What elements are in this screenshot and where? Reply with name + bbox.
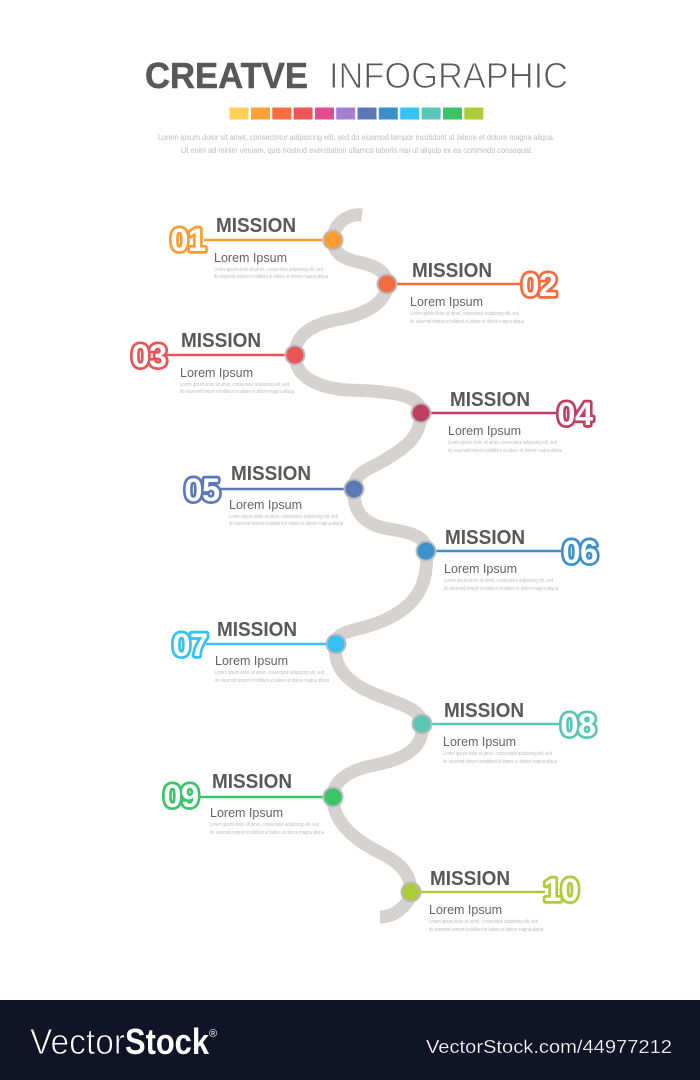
title: [145, 55, 568, 96]
milestone 01: MISSION: [216, 215, 296, 237]
milestone 09: Lorem Ipsum: [210, 806, 283, 820]
footer banner: ®: [209, 1028, 217, 1040]
milestone 04: 04: [557, 396, 593, 432]
milestone 04: do eiusmod tempor incididunt ut labore et dolore magna aliqua: [448, 448, 562, 454]
milestone 08: MISSION: [444, 700, 524, 722]
milestone 01: [170, 215, 342, 280]
footer banner: Vector: [30, 1021, 125, 1062]
milestone 01: Lorem ipsum dolor sit amet, consectetur adipiscing elit, sed: [214, 267, 323, 273]
milestone 02: 02: [521, 267, 557, 303]
milestone 06: do eiusmod tempor incididunt ut labore et dolore magna aliqua: [444, 586, 558, 592]
milestone 03: MISSION: [181, 330, 261, 352]
milestone 04: Lorem ipsum dolor sit amet, consectetur adipiscing elit, sed: [448, 440, 557, 446]
milestone 08: do eiusmod tempor incididunt ut labore et dolore magna aliqua: [443, 759, 557, 765]
milestone 02: MISSION: [412, 260, 492, 282]
footer banner: Stock: [125, 1021, 210, 1062]
colour swatch strip: [230, 108, 483, 120]
milestone 07: Lorem ipsum dolor sit amet, consectetur adipiscing elit, sed: [215, 670, 324, 676]
milestone 10: MISSION: [430, 868, 510, 890]
milestone 06: Lorem Ipsum: [444, 562, 517, 576]
milestone 03: do eiusmod tempor incididunt ut labore et dolore magna aliqua: [180, 389, 294, 395]
milestone 09: Lorem ipsum dolor sit amet, consectetur adipiscing elit, sed: [210, 822, 319, 828]
milestone 10: do eiusmod tempor incididunt ut labore et dolore magna aliqua: [429, 927, 543, 933]
milestone 09: [163, 771, 342, 836]
milestone 07: Lorem Ipsum: [215, 654, 288, 668]
milestone 08: Lorem ipsum dolor sit amet, consectetur adipiscing elit, sed: [443, 751, 552, 757]
intro text: [158, 133, 555, 155]
milestone 02: do eiusmod tempor incididunt ut labore et dolore magna aliqua: [410, 319, 524, 325]
milestone 10: Lorem Ipsum: [429, 903, 502, 917]
milestone 02: Lorem ipsum dolor sit amet, consectetur adipiscing elit, sed: [410, 311, 519, 317]
milestone 07: [172, 619, 346, 684]
milestone 01: 01: [170, 222, 206, 258]
milestone 02: Lorem Ipsum: [410, 295, 483, 309]
milestone 03: [131, 330, 304, 395]
milestone 05: [184, 463, 364, 527]
milestone 07: 07: [172, 627, 208, 663]
milestone 10: Lorem ipsum dolor sit amet, consectetur adipiscing elit, sed: [429, 919, 538, 925]
milestone 01: do eiusmod tempor incididunt ut labore et dolore magna aliqua: [214, 274, 328, 280]
milestone 04: Lorem Ipsum: [448, 424, 521, 438]
milestone 06: MISSION: [445, 527, 525, 549]
title: CREATVE: [145, 55, 308, 96]
title: INFOGRAPHIC: [329, 55, 568, 96]
milestone 03: Lorem ipsum dolor sit amet, consectetur adipiscing elit, sed: [180, 382, 289, 388]
intro text: Ut enim ad minim veniam, quis nostrud exercitation ullamco laboris nisi ut aliquip ex ea commodo consequat.: [181, 146, 533, 155]
milestone 01: Lorem Ipsum: [214, 251, 287, 265]
milestone 05: 05: [184, 472, 220, 508]
intro text: Lorem ipsum dolor sit amet, consectetur adipiscing elit, sed do eiusmod tempor incididunt ut labore et dolore magna aliqua.: [158, 133, 555, 142]
milestone 03: Lorem Ipsum: [180, 366, 253, 380]
milestone 02: [378, 260, 557, 325]
milestone 07: do eiusmod tempor incididunt ut labore et dolore magna aliqua: [215, 678, 329, 684]
milestone 05: do eiusmod tempor incididunt ut labore et dolore magna aliqua: [229, 521, 343, 527]
milestone 05: Lorem ipsum dolor sit amet, consectetur adipiscing elit, sed: [229, 514, 338, 520]
footer banner: [0, 1000, 700, 1080]
footer banner: VectorStock.com/44977212: [426, 1036, 672, 1057]
milestone 05: Lorem Ipsum: [229, 498, 302, 512]
milestone 05: MISSION: [231, 463, 311, 485]
milestone 10: 10: [543, 872, 579, 908]
winding road path: [295, 215, 427, 917]
milestone 04: MISSION: [450, 389, 530, 411]
milestone 08: [412, 700, 596, 765]
milestone 04: [412, 389, 593, 454]
milestone 09: 09: [163, 778, 199, 814]
milestone 08: Lorem Ipsum: [443, 735, 516, 749]
milestone 06: 06: [562, 534, 598, 570]
milestone 03: 03: [131, 338, 167, 374]
milestone 07: MISSION: [217, 619, 297, 641]
milestone 10: [402, 868, 579, 933]
milestone 06: [416, 527, 598, 592]
milestone 09: MISSION: [212, 771, 292, 793]
milestone 06: Lorem ipsum dolor sit amet, consectetur adipiscing elit, sed: [444, 578, 553, 584]
milestone 08: 08: [560, 707, 596, 743]
milestone 09: do eiusmod tempor incididunt ut labore et dolore magna aliqua: [210, 830, 324, 836]
